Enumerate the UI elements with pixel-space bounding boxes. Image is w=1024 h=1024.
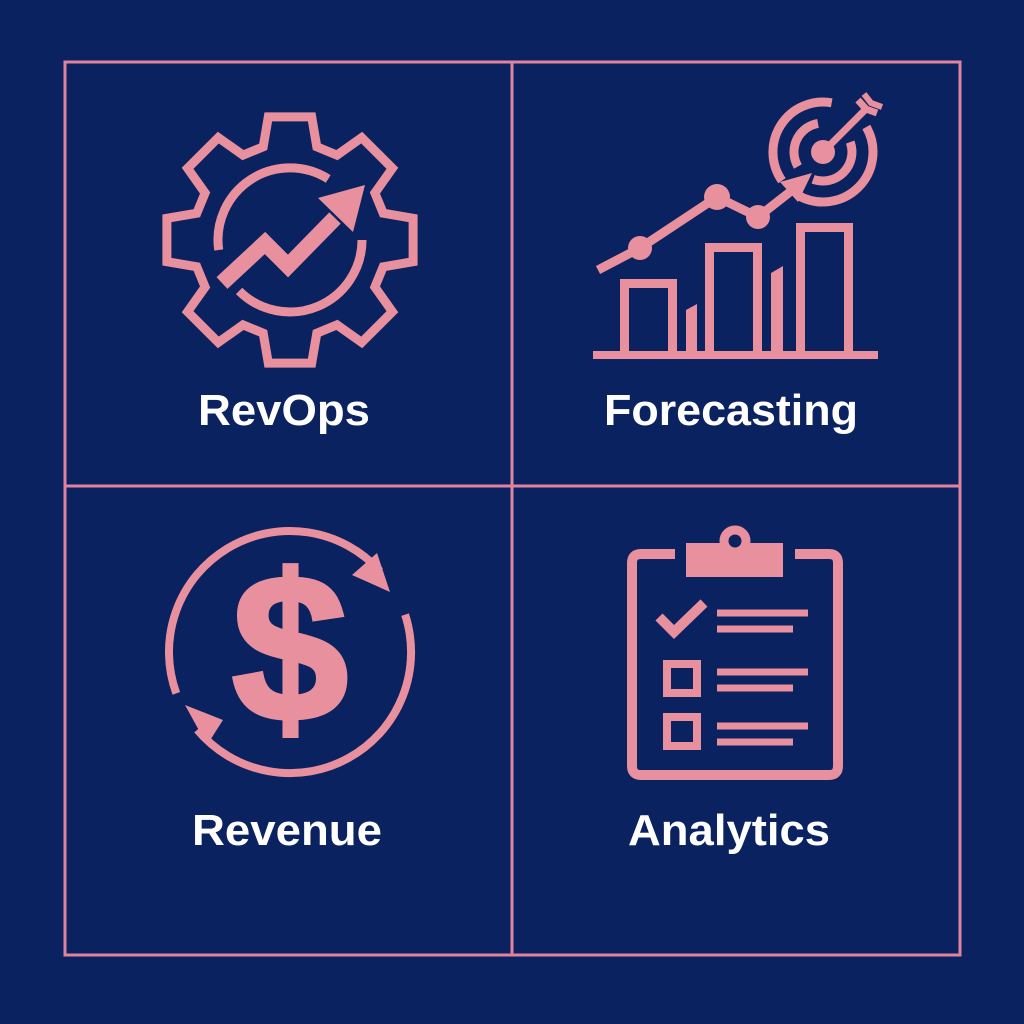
- panel: RevOps: [167, 117, 413, 435]
- label: Forecasting: Forecasting: [604, 386, 858, 435]
- panel: Revenue: [169, 531, 411, 855]
- panel: Revenue: $: [232, 533, 348, 765]
- icon: dollar with circular arrows: [169, 531, 411, 773]
- grid frame: [65, 62, 960, 955]
- icon: clipboard checklist: [632, 530, 838, 775]
- icon: bar chart with target: [593, 94, 882, 359]
- label: RevOps: RevOps: [198, 386, 370, 435]
- panel: Forecasting: [593, 94, 882, 435]
- panel: Analytics: [628, 530, 838, 855]
- label: Analytics: Analytics: [628, 806, 830, 855]
- label: Revenue: Revenue: [192, 806, 382, 855]
- icon: gear with growth arrow: [167, 117, 413, 363]
